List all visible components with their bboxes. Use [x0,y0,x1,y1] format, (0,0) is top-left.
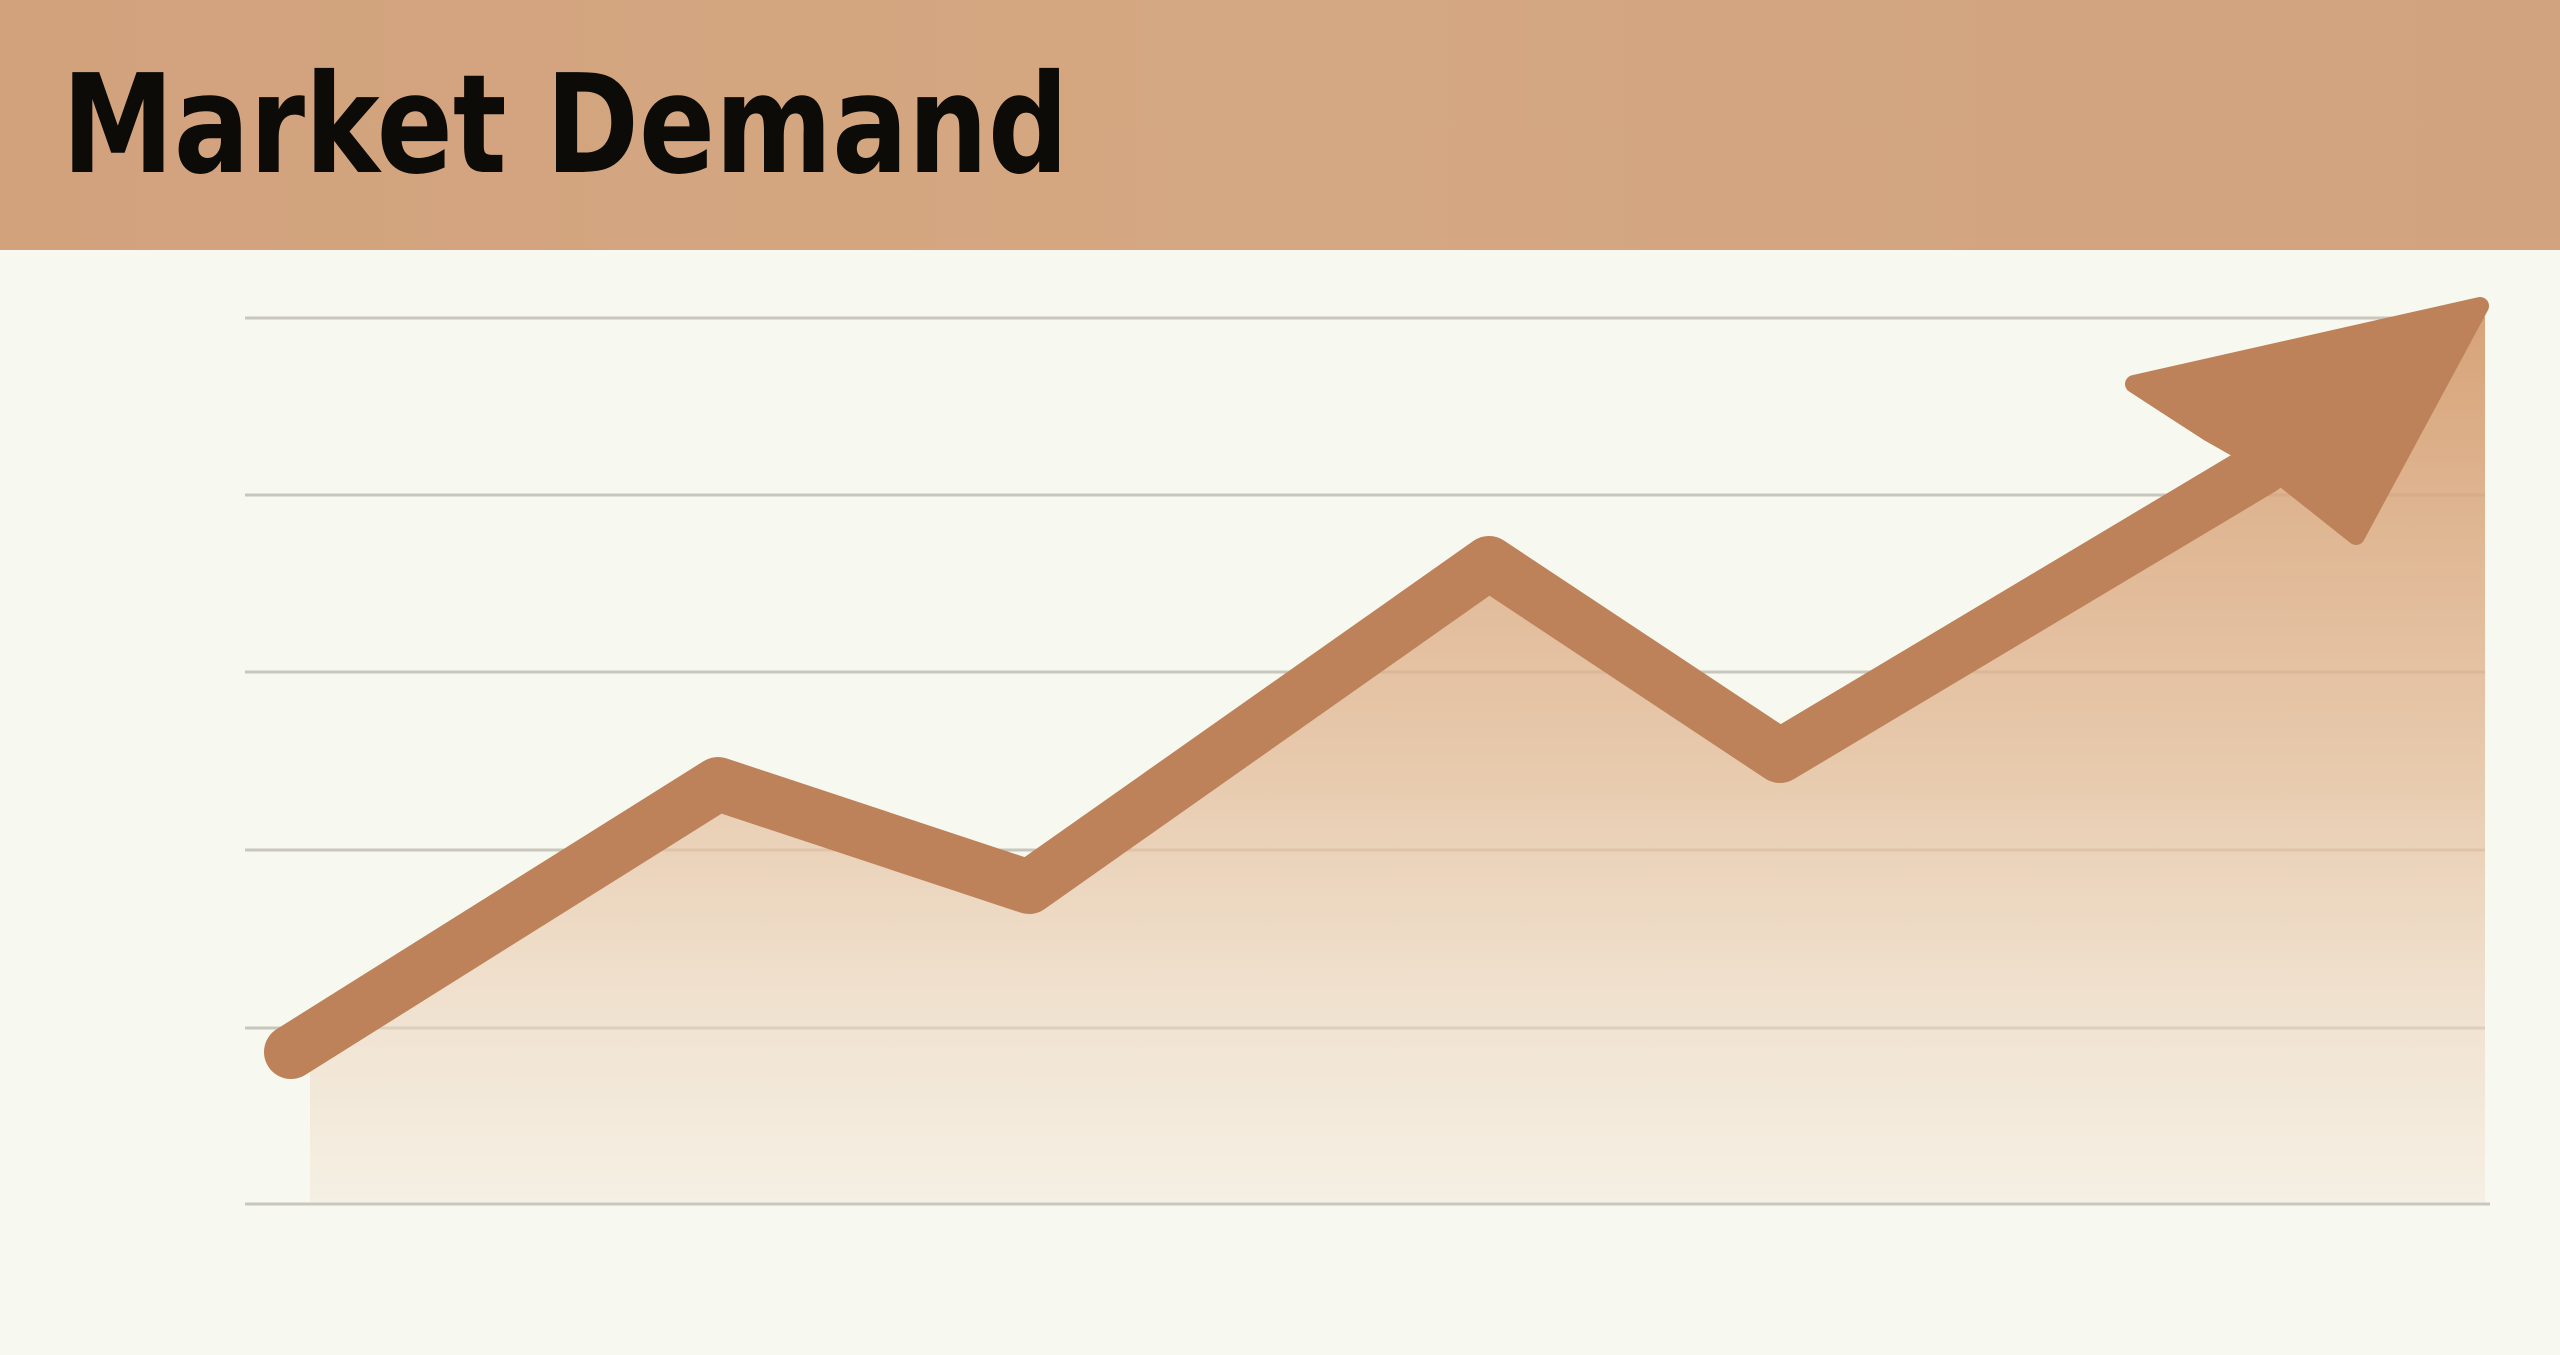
arrowhead [2134,306,2480,536]
title: Market Demand [62,46,1068,205]
trend line arrow [291,468,2262,1052]
shaded area under line [310,310,2485,1202]
header band [0,0,2560,250]
